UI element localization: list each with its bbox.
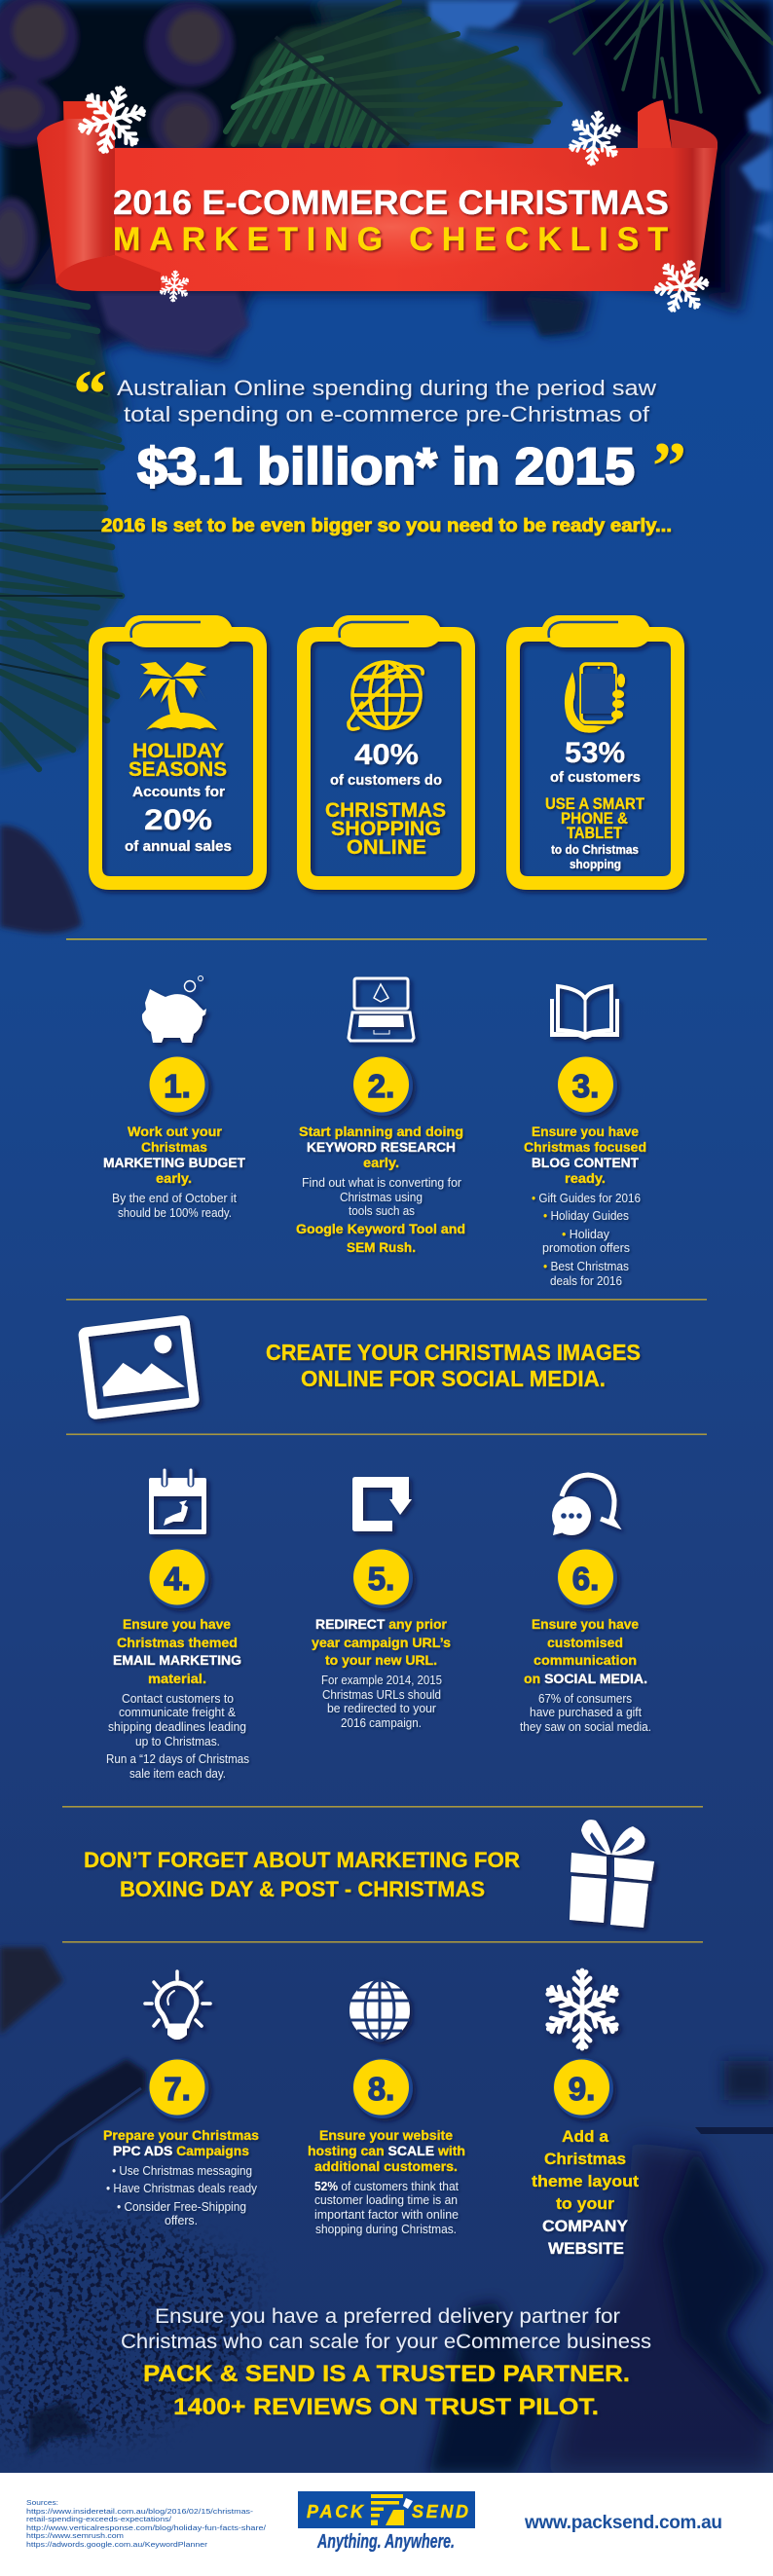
text: • Holiday <box>562 1227 609 1241</box>
text: they saw on social media. <box>520 1719 651 1734</box>
text: 20% <box>144 804 212 836</box>
text: Prepare your Christmas <box>103 2128 259 2143</box>
text: Accounts for <box>132 784 225 800</box>
text: be redirected to your <box>327 1701 437 1715</box>
number badge <box>352 1055 413 1116</box>
snowflakes <box>72 80 715 320</box>
sources: Sources: <box>26 2498 58 2507</box>
number badge: 7. <box>164 2071 191 2107</box>
number badge <box>148 1548 208 1608</box>
left flap <box>63 101 115 148</box>
icon: gift box <box>570 1820 654 1928</box>
pine needles left <box>0 292 122 769</box>
text: shopping <box>570 857 621 871</box>
text: ready. <box>565 1170 606 1186</box>
text: ONLINE <box>347 836 426 859</box>
step 9 <box>532 1970 640 2258</box>
text: hosting can SCALE with <box>308 2144 465 2158</box>
text: to do Christmas <box>551 842 639 857</box>
text: of annual sales <box>125 838 232 855</box>
icon: hand holding phone <box>565 664 625 733</box>
mottled speckle <box>0 2220 253 2444</box>
snowy branches top <box>428 0 773 240</box>
quote intro <box>73 357 686 536</box>
icon: open book <box>550 986 619 1040</box>
text: PHONE & <box>561 809 628 828</box>
text: Contact customers to <box>122 1691 234 1706</box>
text: Ensure you have <box>123 1616 231 1632</box>
text <box>325 739 446 859</box>
heading <box>266 1340 641 1391</box>
text: shopping during Christmas. <box>315 2223 457 2236</box>
top dark foliage backdrop <box>0 0 773 458</box>
text: For example 2014, 2015 <box>321 1673 442 1687</box>
icon: calendar <box>149 1470 206 1534</box>
text: USE A SMART <box>545 794 645 813</box>
text: early. <box>156 1170 192 1186</box>
logo: PACK <box>307 2502 365 2521</box>
text <box>312 1616 451 1730</box>
text: Google Keyword Tool and <box>296 1221 465 1236</box>
step 7 <box>103 1971 259 2227</box>
text: on SOCIAL MEDIA. <box>524 1671 647 1686</box>
heading: DON’T FORGET ABOUT MARKETING FOR <box>84 1848 520 1872</box>
closing message: PACK & SEND IS A TRUSTED PARTNER. <box>143 2361 630 2387</box>
quote intro: Australian Online spending during the period saw <box>117 376 657 400</box>
text: MARKETING BUDGET <box>103 1155 245 1170</box>
number badge: 6. <box>572 1561 599 1597</box>
text: 53% <box>565 737 625 769</box>
text: to your new URL. <box>325 1652 437 1668</box>
website url: www.packsend.com.au <box>524 2513 722 2533</box>
text: Christmas <box>544 2151 626 2168</box>
number badge: 8. <box>368 2071 394 2107</box>
right dark shape <box>545 2142 773 2473</box>
number badge <box>557 1548 617 1608</box>
card: shopping online <box>297 615 475 890</box>
left curl <box>37 119 115 284</box>
main band <box>112 148 672 291</box>
text: KEYWORD RESEARCH <box>307 1139 456 1155</box>
text: additional customers. <box>314 2159 458 2174</box>
text: • Have Christmas deals ready <box>106 2182 258 2195</box>
text: • Use Christmas messaging <box>112 2164 252 2178</box>
text: tools such as <box>349 1203 415 1218</box>
sources: https://adwords.google.com.au/KeywordPlanner <box>26 2540 208 2549</box>
text: should be 100% ready. <box>118 1205 232 1220</box>
number badge <box>352 2058 413 2118</box>
quote intro: 2016 Is set to be even bigger so you need to be ready early... <box>101 516 672 536</box>
text: important factor with online <box>314 2208 459 2222</box>
text: PPC ADS Campaigns <box>113 2144 249 2158</box>
text: Start planning and doing <box>299 1123 463 1139</box>
text: material. <box>148 1671 206 1686</box>
text: Ensure you have <box>532 1123 639 1139</box>
right flap <box>638 100 672 148</box>
text: Christmas <box>141 1139 207 1155</box>
text <box>103 2128 259 2227</box>
text: deals for 2016 <box>550 1273 622 1288</box>
text: Work out your <box>128 1123 223 1139</box>
closing message: 1400+ REVIEWS ON TRUST PILOT. <box>173 2394 599 2420</box>
text: Christmas focused <box>524 1139 646 1155</box>
number badge <box>148 1055 208 1116</box>
logo: SEND <box>412 2502 468 2521</box>
text: 2016 campaign. <box>341 1715 422 1730</box>
text: Ensure your website <box>319 2128 454 2143</box>
icon: palm tree <box>139 662 217 730</box>
sources: https://www.insideretail.com.au/blog/2016/02/15/christmas- <box>26 2507 254 2516</box>
step 3 <box>524 986 646 1288</box>
text: SHOPPING <box>331 818 441 840</box>
step 6 <box>520 1475 651 1734</box>
text: Find out what is converting for <box>302 1175 462 1190</box>
text: SEASONS <box>129 758 227 781</box>
text <box>106 1616 249 1781</box>
text: Christmas themed <box>117 1635 238 1650</box>
pinecones <box>0 0 584 934</box>
text: customised <box>547 1635 623 1650</box>
text: • Best Christmas <box>543 1259 629 1273</box>
text: • Holiday Guides <box>543 1208 629 1223</box>
icon: light bulb <box>145 1971 210 2040</box>
text: to your <box>556 2195 615 2213</box>
text <box>296 1123 465 1255</box>
right curl <box>669 119 718 148</box>
number badge <box>352 1548 413 1608</box>
text: customer loading time is an <box>314 2193 458 2207</box>
banner: create images <box>83 1320 641 1415</box>
text: SEM Rush. <box>347 1239 416 1255</box>
text <box>308 2128 465 2236</box>
text <box>532 2128 640 2258</box>
footer <box>0 2473 773 2576</box>
number badge <box>553 2058 613 2118</box>
text: 40% <box>354 739 419 771</box>
sources: http://www.verticalresponse.com/blog/holiday-fun-facts-share/ <box>26 2523 267 2532</box>
card: holiday seasons <box>89 615 267 890</box>
text <box>545 737 645 871</box>
text: BLOG CONTENT <box>532 1155 639 1170</box>
card: smart phone <box>506 615 684 890</box>
needle masses <box>0 10 560 769</box>
text: CHRISTMAS <box>325 799 446 822</box>
pine needles top right <box>550 0 773 112</box>
text: Ensure you have <box>532 1616 639 1632</box>
icon: laptop <box>349 978 414 1041</box>
sources <box>26 2498 267 2549</box>
text: have purchased a gift <box>530 1705 642 1719</box>
heading <box>84 1848 520 1901</box>
closing message: Christmas who can scale for your eCommerce business <box>121 2331 651 2353</box>
title <box>113 184 669 258</box>
text: year campaign URL’s <box>312 1635 451 1650</box>
text: 52% of customers think that <box>314 2180 459 2193</box>
icon: picture <box>83 1320 195 1415</box>
text <box>125 740 232 855</box>
sources: https://www.semrush.com <box>26 2531 124 2540</box>
step 4 <box>106 1470 249 1781</box>
text: of customers do <box>330 772 442 789</box>
text: WEBSITE <box>548 2240 624 2258</box>
sources: retail-spending-exceeds-expectations/ <box>26 2515 172 2523</box>
number badge: 3. <box>572 1068 599 1104</box>
heading: ONLINE FOR SOCIAL MEDIA. <box>301 1366 606 1391</box>
closing message <box>121 2305 651 2420</box>
ribbon banner <box>37 80 718 320</box>
number badge: 1. <box>164 1068 191 1104</box>
number badge: 9. <box>569 2071 595 2107</box>
icon: speech bubbles <box>552 1475 615 1535</box>
clipboard cards <box>89 615 684 890</box>
title: 2016 E-COMMERCE CHRISTMAS <box>113 184 669 222</box>
quote intro: $3.1 billion* in 2015 <box>137 438 635 496</box>
quote intro: total spending on e-commerce pre-Christmas of <box>124 402 650 426</box>
closing message: Ensure you have a preferred delivery partner for <box>155 2305 620 2328</box>
icon: snowflake <box>544 1970 620 2048</box>
text: promotion offers <box>542 1240 630 1255</box>
text: By the end of October it <box>112 1191 237 1205</box>
step 1 <box>103 975 245 1220</box>
icon: piggy bank <box>142 975 206 1043</box>
number badge: 2. <box>368 1068 394 1104</box>
text <box>103 1123 245 1220</box>
quote mark close: ” <box>652 429 686 504</box>
text: • Consider Free-Shipping <box>117 2200 246 2214</box>
logo <box>298 2491 475 2553</box>
text: Christmas using <box>340 1190 423 1204</box>
text: theme layout <box>532 2173 640 2190</box>
number badge <box>148 2058 208 2118</box>
icon: globe <box>349 662 423 729</box>
text: • Gift Guides for 2016 <box>532 1191 641 1205</box>
text: REDIRECT any prior <box>315 1616 448 1632</box>
text: EMAIL MARKETING <box>113 1652 241 1668</box>
text: sale item each day. <box>129 1766 226 1781</box>
text: TABLET <box>567 824 623 842</box>
text <box>520 1616 651 1734</box>
number badge: 5. <box>368 1561 394 1597</box>
text: COMPANY <box>542 2218 628 2235</box>
quote mark open: “ <box>73 357 107 432</box>
text: of customers <box>550 769 641 786</box>
icon: redirect <box>352 1477 412 1531</box>
step 2 <box>296 978 465 1255</box>
text <box>524 1123 646 1288</box>
pine needles centre branch <box>226 2 560 146</box>
text: 67% of consumers <box>538 1691 632 1706</box>
text: early. <box>363 1155 399 1170</box>
heading: BOXING DAY & POST - CHRISTMAS <box>120 1877 485 1901</box>
heading: CREATE YOUR CHRISTMAS IMAGES <box>266 1340 641 1365</box>
bottom dark shapes <box>0 1947 146 2456</box>
text: shipping deadlines leading <box>108 1719 246 1734</box>
text: HOLIDAY <box>132 740 224 762</box>
number badge <box>557 1055 617 1116</box>
logo: Anything. Anywhere. <box>316 2531 455 2553</box>
step 8 <box>308 1980 465 2236</box>
text: communication <box>534 1652 637 1668</box>
text: Run a “12 days of Christmas <box>106 1751 249 1766</box>
text: communicate freight & <box>119 1705 236 1719</box>
text: Christmas URLs should <box>322 1687 441 1702</box>
title: MARKETING CHECKLIST <box>113 221 668 258</box>
icon: world grid <box>350 1980 410 2041</box>
banner: boxing day <box>84 1820 654 1928</box>
number badge: 4. <box>164 1561 191 1597</box>
text: up to Christmas. <box>135 1734 220 1748</box>
text: Add a <box>562 2128 609 2146</box>
step 5 <box>312 1477 451 1730</box>
text: offers. <box>165 2214 198 2227</box>
